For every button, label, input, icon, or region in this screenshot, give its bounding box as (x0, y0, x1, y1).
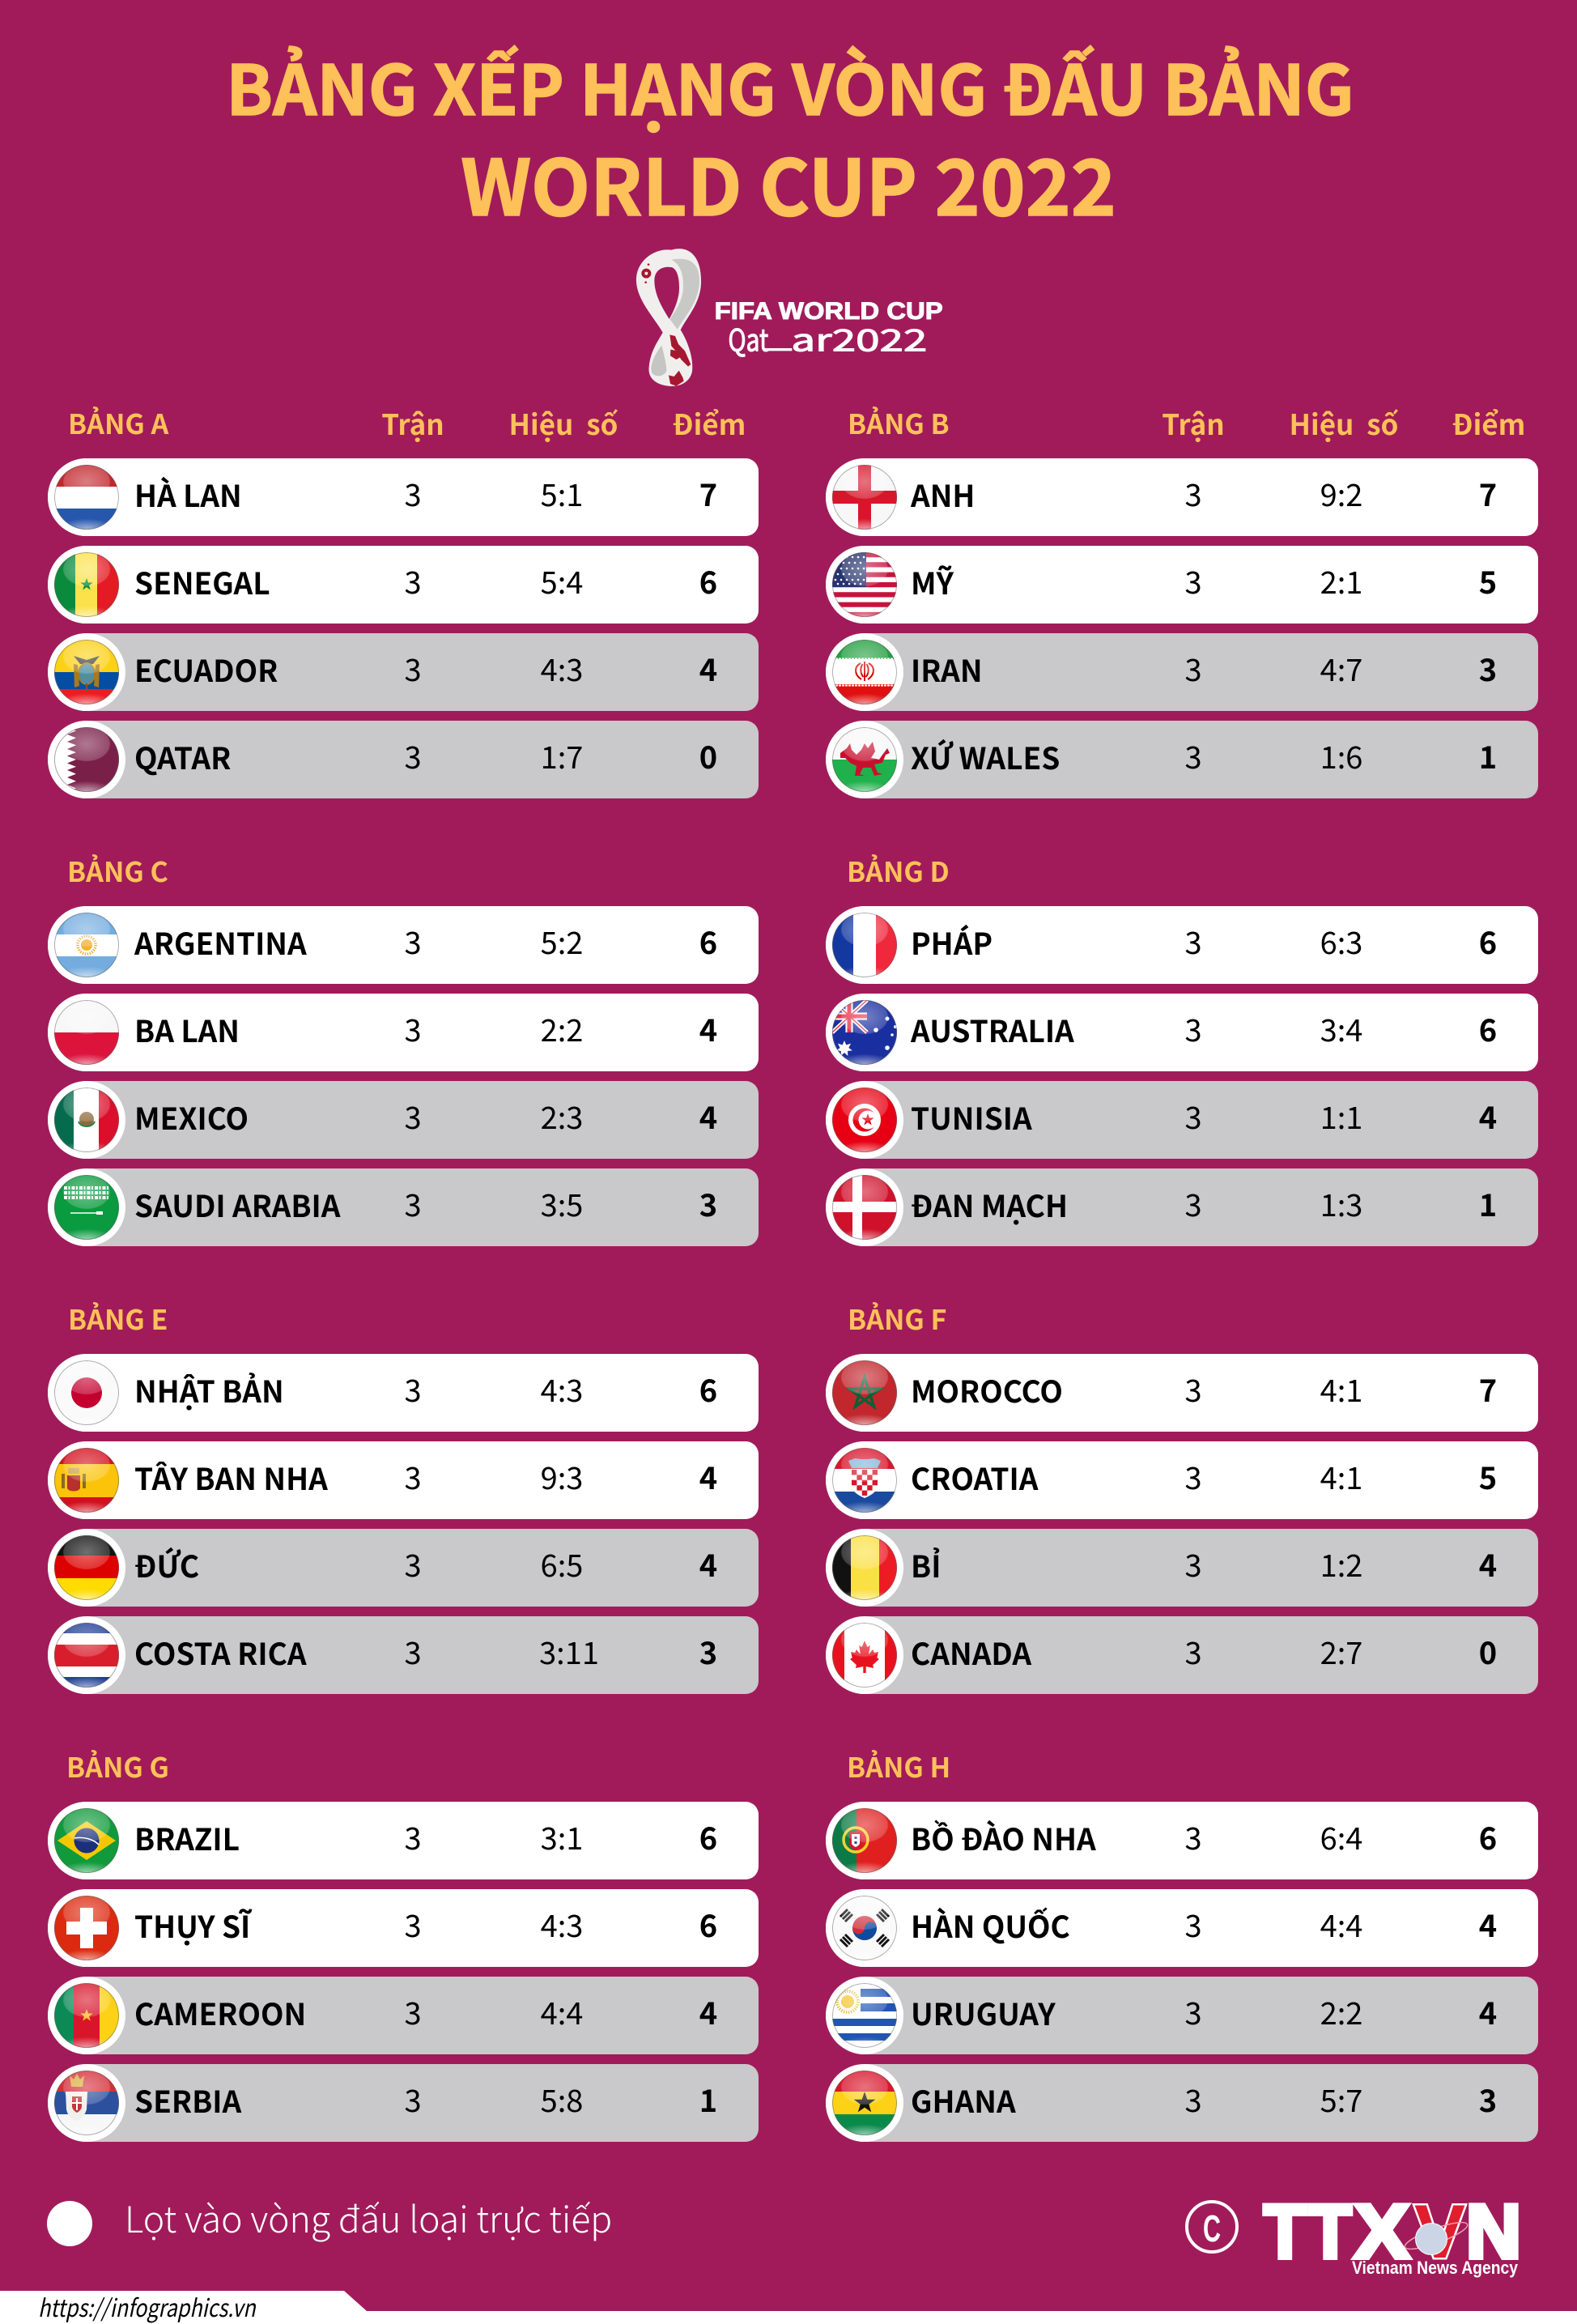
goals: 3:5 (541, 1181, 583, 1225)
goals: 4:1 (1320, 1454, 1362, 1498)
icon: flag Germany (48, 1529, 125, 1607)
row: Ghana (826, 2064, 1538, 2142)
row: Đức (48, 1529, 759, 1607)
matches: 3 (1184, 1814, 1202, 1858)
icon: flag Saudi Arabia (48, 1168, 125, 1246)
goals: 1:1 (1320, 1093, 1362, 1138)
column heading: points: Điểm (673, 402, 746, 444)
row: Bồ Đào Nha (826, 1802, 1538, 1879)
team name: HÀ LAN (134, 472, 242, 516)
copyright symbol (1187, 2202, 1237, 2252)
icon: flag Denmark (826, 1168, 903, 1246)
points: 4 (1479, 1093, 1497, 1138)
row: Costa Rica (48, 1616, 759, 1694)
goals: 3:1 (541, 1814, 583, 1858)
points: 4 (699, 1093, 717, 1138)
logo text: FIFA World Cup: FIFA WORLD CUP (715, 298, 943, 325)
panel: Bảng D (826, 850, 1538, 1246)
icon: flag Costa Rica (48, 1616, 125, 1694)
icon: flag France (826, 906, 903, 984)
points: 1 (699, 2076, 717, 2121)
row: Saudi Arabia (48, 1168, 759, 1246)
row: Thụy Sĩ (48, 1889, 759, 1967)
team name: SENEGAL (134, 560, 270, 603)
goals: 2:7 (1320, 1628, 1362, 1673)
team name: TUNISIA (911, 1095, 1032, 1139)
icon: flag Senegal (48, 546, 125, 624)
row: Mỹ (826, 546, 1538, 624)
team name: THỤY SĨ (134, 1903, 250, 1947)
goals: 9:3 (541, 1454, 583, 1498)
goals: 5:4 (541, 558, 583, 602)
logo text: Qatar 2022 (728, 316, 927, 360)
goals: 4:4 (1320, 1901, 1362, 1946)
goals: 1:7 (541, 733, 583, 777)
column heading: matches: Trận (381, 402, 444, 444)
row: Xứ Wales (826, 721, 1538, 798)
row: Croatia (826, 1441, 1538, 1519)
matches: 3 (1184, 1628, 1202, 1673)
column heading: goal difference: Hiệu số (1290, 402, 1398, 444)
group heading: BẢNG C (67, 850, 168, 890)
points: 4 (699, 1454, 717, 1498)
footer bar (0, 2291, 1577, 2324)
points: 4 (699, 1006, 717, 1050)
team name: ĐỨC (134, 1543, 199, 1586)
row: Brazil (48, 1802, 759, 1879)
matches: 3 (1184, 470, 1202, 515)
goals: 6:5 (541, 1541, 583, 1586)
points: 4 (1479, 1901, 1497, 1946)
icon: flag Morocco (826, 1354, 903, 1432)
team name: GHANA (911, 2078, 1016, 2122)
icon: flag Argentina (48, 906, 125, 984)
matches: 3 (1184, 1006, 1202, 1050)
points: 5 (1479, 1454, 1497, 1498)
goals: 4:4 (541, 1989, 583, 2033)
team name: HÀN QUỐC (911, 1903, 1070, 1947)
row: Serbia (48, 2064, 759, 2142)
matches: 3 (404, 918, 422, 963)
panel: Bảng E (48, 1298, 759, 1694)
panel: Bảng G (48, 1746, 759, 2142)
row: Qatar (48, 721, 759, 798)
team name: CROATIA (911, 1455, 1038, 1499)
matches: 3 (1184, 1093, 1202, 1138)
matches: 3 (404, 1366, 422, 1411)
globe (1402, 2218, 1470, 2254)
column heading: matches: Trận (1162, 402, 1225, 444)
emblem: figure eight (636, 249, 701, 386)
row: Australia (826, 994, 1538, 1071)
matches: 3 (1184, 2076, 1202, 2121)
icon: flag Ghana (826, 2064, 903, 2142)
team name: ECUADOR (134, 647, 278, 691)
matches: 3 (1184, 1541, 1202, 1586)
points: 3 (1479, 645, 1497, 690)
agency wordmark: T (1264, 2189, 1307, 2274)
icon: flag Croatia (826, 1441, 903, 1519)
goals: 2:2 (541, 1006, 583, 1050)
goals: 5:2 (541, 918, 583, 963)
icon: flag Portugal (826, 1802, 903, 1879)
team name: MỸ (911, 560, 954, 603)
matches: 3 (1184, 1901, 1202, 1946)
points: 5 (1479, 558, 1497, 602)
team name: MOROCCO (911, 1368, 1063, 1411)
row: Ecuador (48, 633, 759, 711)
panel: Bảng A (48, 402, 759, 798)
icon: flag Japan (48, 1354, 125, 1432)
matches: 3 (404, 1901, 422, 1946)
matches: 3 (404, 1454, 422, 1498)
icon: flag Belgium (826, 1529, 903, 1607)
matches: 3 (1184, 558, 1202, 602)
goals: 3:4 (1320, 1006, 1362, 1050)
points: 6 (699, 1814, 717, 1858)
matches: 3 (404, 1181, 422, 1225)
row: Anh (826, 458, 1538, 536)
icon: flag Spain (48, 1441, 125, 1519)
points: 4 (699, 1541, 717, 1586)
goals: 1:2 (1320, 1541, 1362, 1586)
points: 3 (1479, 2076, 1497, 2121)
goals: 4:3 (541, 1366, 583, 1411)
row: Đan Mạch (826, 1168, 1538, 1246)
points: 4 (699, 645, 717, 690)
team name: URUGUAY (911, 1990, 1056, 2034)
row: Tây Ban Nha (48, 1441, 759, 1519)
copyright symbol: C (1203, 2207, 1221, 2250)
team name: CAMEROON (134, 1990, 306, 2034)
icon: flag Uruguay (826, 1977, 903, 2054)
goals: 4:7 (1320, 645, 1362, 690)
group heading: BẢNG F (848, 1298, 946, 1338)
points: 4 (1479, 1989, 1497, 2033)
logo: TTXVN (1185, 2189, 1521, 2278)
icon: flag Cameroon (48, 1977, 125, 2054)
goals: 1:6 (1320, 733, 1362, 777)
points: 6 (699, 558, 717, 602)
points: 6 (1479, 918, 1497, 963)
row: Canada (826, 1616, 1538, 1694)
matches: 3 (404, 733, 422, 777)
matches: 3 (404, 1814, 422, 1858)
points: 6 (1479, 1814, 1497, 1858)
points: 1 (1479, 733, 1497, 777)
goals: 2:3 (541, 1093, 583, 1138)
row: Argentina (48, 906, 759, 984)
matches: 3 (1184, 1366, 1202, 1411)
icon: flag Australia (826, 994, 903, 1071)
agency wordmark (1264, 2189, 1521, 2274)
goals: 6:3 (1320, 918, 1362, 963)
goals: 4:1 (1320, 1366, 1362, 1411)
icon: flag Qatar (48, 721, 125, 798)
matches: 3 (1184, 733, 1202, 777)
icon: flag South Korea (826, 1889, 903, 1967)
matches: 3 (1184, 1454, 1202, 1498)
agency wordmark: X (1354, 2189, 1409, 2274)
points: 4 (699, 1989, 717, 2033)
points: 7 (699, 470, 717, 515)
team name: IRAN (911, 647, 983, 691)
icon: flag Tunisia (826, 1081, 903, 1159)
team name: BA LAN (134, 1007, 240, 1051)
matches: 3 (404, 1093, 422, 1138)
matches: 3 (404, 645, 422, 690)
team name: CANADA (911, 1630, 1031, 1674)
points: 7 (1479, 470, 1497, 515)
row: Cameroon (48, 1977, 759, 2054)
points: 3 (699, 1181, 717, 1225)
legend text: Lọt vào vòng đấu loại trực tiếp (125, 2190, 612, 2243)
goals: 9:2 (1320, 470, 1362, 515)
group heading: BẢNG G (66, 1746, 169, 1786)
goals: 3:11 (539, 1628, 599, 1673)
panel: Bảng C (48, 850, 759, 1246)
group heading: BẢNG D (847, 850, 950, 890)
matches: 3 (1184, 645, 1202, 690)
group heading: BẢNG E (68, 1298, 168, 1338)
legend (47, 2190, 612, 2246)
matches: 3 (404, 470, 422, 515)
matches: 3 (1184, 1989, 1202, 2033)
agency wordmark: V (1414, 2189, 1465, 2274)
team name: ĐAN MẠCH (911, 1182, 1068, 1226)
goals: 2:1 (1320, 558, 1362, 602)
team name: BRAZIL (134, 1815, 240, 1859)
points: 6 (1479, 1006, 1497, 1050)
goals: 5:7 (1320, 2076, 1362, 2121)
team name: BỒ ĐÀO NHA (911, 1815, 1096, 1859)
points: 6 (699, 1366, 717, 1411)
title line 2: WORLD CUP 2022 (461, 127, 1116, 238)
goals: 4:3 (541, 645, 583, 690)
row: Uruguay (826, 1977, 1538, 2054)
panel: Bảng F (826, 1298, 1538, 1694)
matches: 3 (404, 1989, 422, 2033)
points: 7 (1479, 1366, 1497, 1411)
row: Pháp (826, 906, 1538, 984)
points: 1 (1479, 1181, 1497, 1225)
team name: SAUDI ARABIA (134, 1182, 340, 1226)
row: Mexico (48, 1081, 759, 1159)
agency wordmark: T (1309, 2189, 1352, 2274)
column heading: goal difference: Hiệu số (509, 402, 618, 444)
icon: flag England (826, 458, 903, 536)
logo text: Qatar 2022: ar2022 (791, 316, 927, 360)
team name: BỈ (911, 1543, 941, 1586)
icon: flag Serbia (48, 2064, 125, 2142)
matches: 3 (404, 2076, 422, 2121)
icon: flag Iran (826, 633, 903, 711)
matches: 3 (404, 1628, 422, 1673)
points: 0 (699, 733, 717, 777)
panel: Bảng H (826, 1746, 1538, 2142)
matches: 3 (404, 1541, 422, 1586)
matches: 3 (1184, 1181, 1202, 1225)
matches: 3 (1184, 918, 1202, 963)
team name: PHÁP (911, 920, 993, 964)
row: Hàn Quốc (826, 1889, 1538, 1967)
icon: flag Ecuador (48, 633, 125, 711)
row: Senegal (48, 546, 759, 624)
goals: 1:3 (1320, 1181, 1362, 1225)
logo: FIFA World Cup Qatar 2022 (636, 249, 943, 386)
team name: COSTA RICA (134, 1630, 307, 1674)
team name: TÂY BAN NHA (134, 1455, 328, 1499)
row: Ba Lan (48, 994, 759, 1071)
row: Iran (826, 633, 1538, 711)
team name: ANH (911, 472, 975, 516)
row: Bỉ (826, 1529, 1538, 1607)
logo text: Qatar 2022: Qat (728, 316, 768, 360)
title line 1: BẢNG XẾP HẠNG VÒNG ĐẤU BẢNG (226, 36, 1354, 135)
team name: ARGENTINA (134, 920, 307, 964)
icon: flag Brazil (48, 1802, 125, 1879)
goals: 2:2 (1320, 1989, 1362, 2033)
group heading: BẢNG B (848, 402, 950, 442)
points: 3 (699, 1628, 717, 1673)
legend swatch (47, 2201, 92, 2246)
goals: 5:1 (541, 470, 583, 515)
team name: SERBIA (134, 2078, 241, 2122)
icon: flag Wales (826, 721, 903, 798)
points: 4 (1479, 1541, 1497, 1586)
icon: flag Switzerland (48, 1889, 125, 1967)
points: 6 (699, 1901, 717, 1946)
agency name: Vietnam News Agency (1352, 2258, 1519, 2278)
matches: 3 (404, 1006, 422, 1050)
icon: flag Netherlands (48, 458, 125, 536)
goals: 5:8 (541, 2076, 583, 2121)
icon: flag Poland (48, 994, 125, 1071)
row: Nhật Bản (48, 1354, 759, 1432)
panel: Bảng B (826, 402, 1538, 798)
icon: flag Mexico (48, 1081, 125, 1159)
team name: QATAR (134, 734, 231, 778)
matches: 3 (404, 558, 422, 602)
group heading: BẢNG A (68, 402, 168, 442)
points: 6 (699, 918, 717, 963)
footer url: https://infographics.vn (38, 2288, 256, 2324)
icon: flag Canada (826, 1616, 903, 1694)
row: Tunisia (826, 1081, 1538, 1159)
team name: AUSTRALIA (911, 1007, 1074, 1051)
goals: 6:4 (1320, 1814, 1362, 1858)
team name: MEXICO (134, 1095, 249, 1139)
goals: 4:3 (541, 1901, 583, 1946)
row: Hà Lan (48, 458, 759, 536)
team name: NHẬT BẢN (134, 1368, 284, 1411)
column heading: points: Điểm (1452, 402, 1525, 444)
row: Morocco (826, 1354, 1538, 1432)
team name: XỨ WALES (911, 734, 1060, 778)
icon: flag USA (826, 546, 903, 624)
agency wordmark: N (1466, 2189, 1521, 2274)
group heading: BẢNG H (847, 1746, 950, 1786)
points: 0 (1479, 1628, 1497, 1673)
